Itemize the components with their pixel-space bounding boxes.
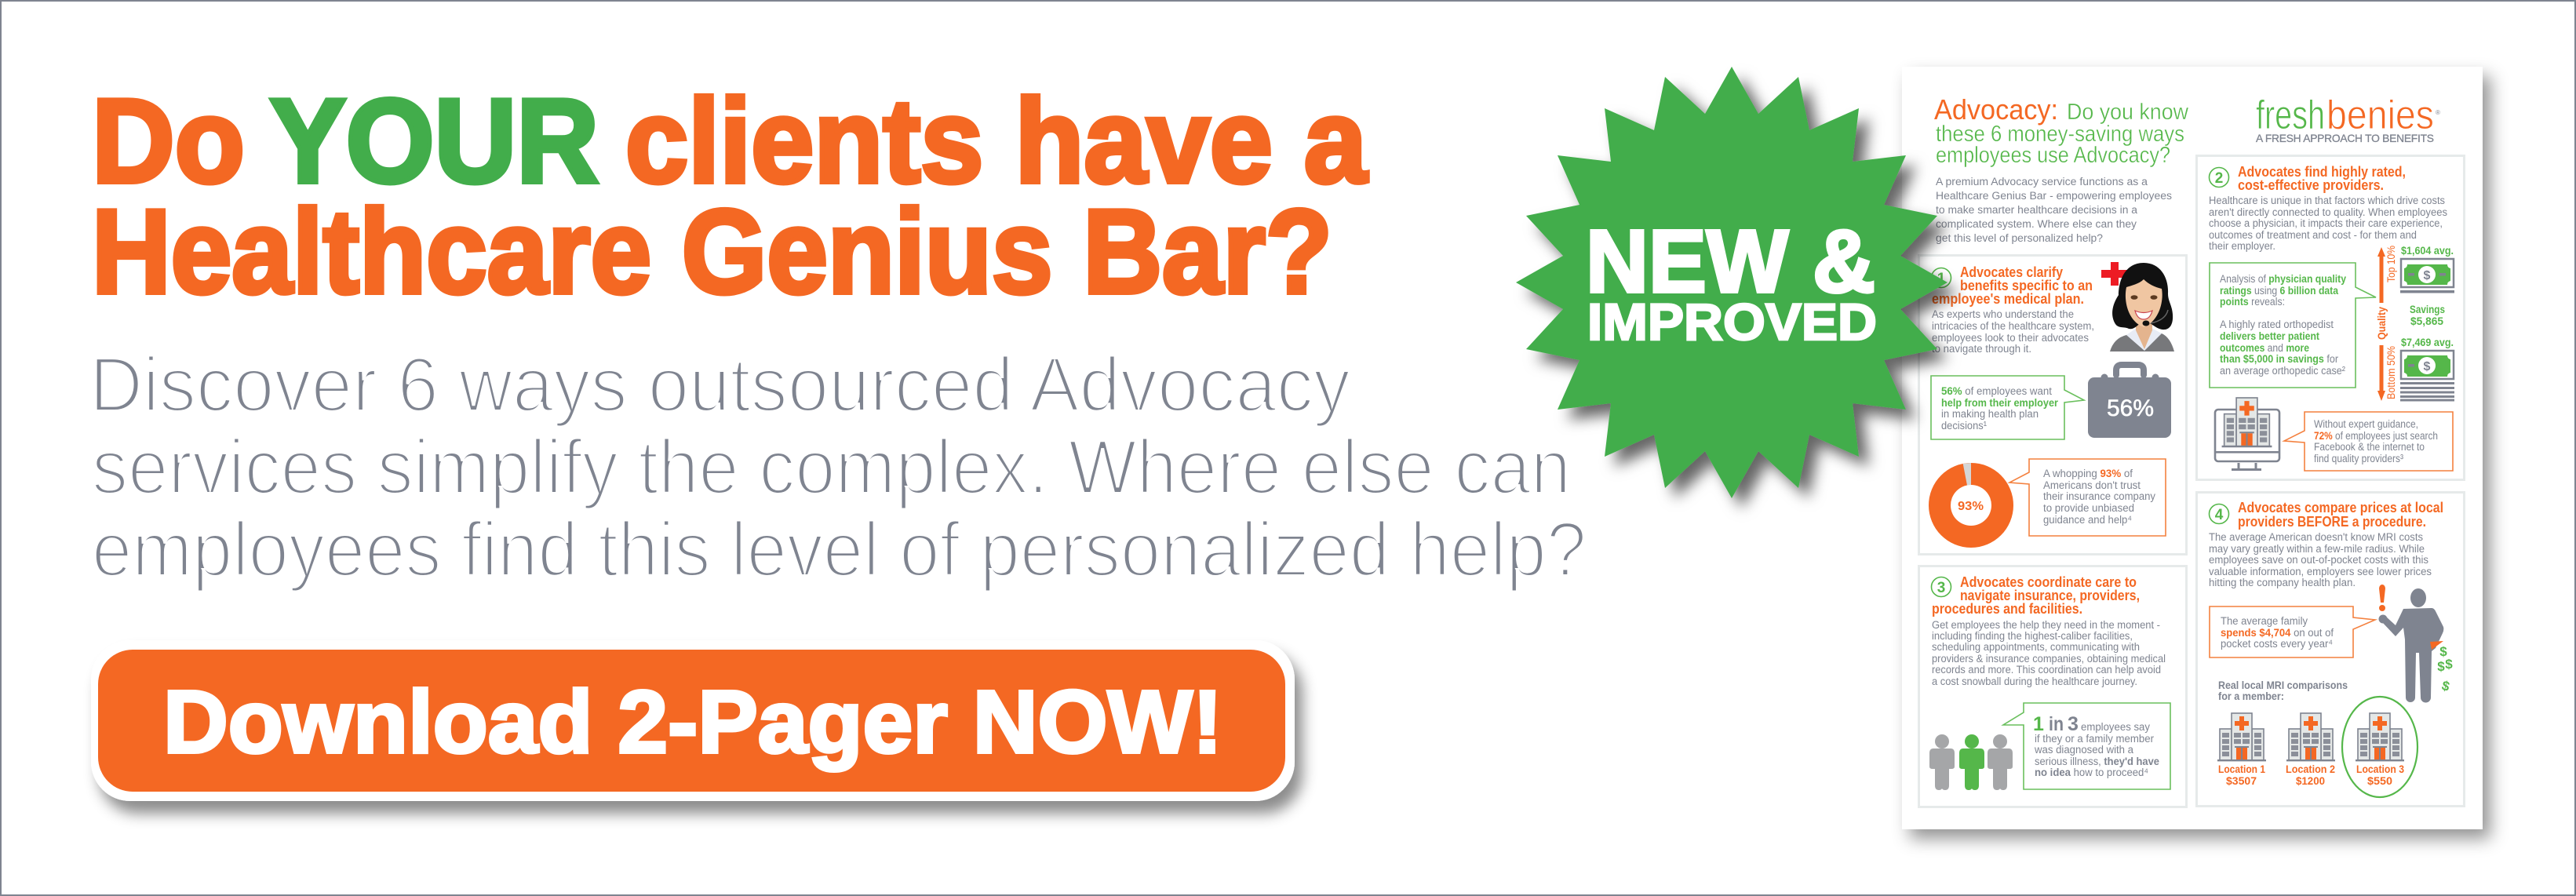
savings label	[2410, 304, 2445, 327]
heading 4: providers BEFORE a procedure.	[2238, 514, 2426, 530]
heading 1: employee's medical plan.	[1932, 291, 2084, 307]
subtitle: services simplify the complex. Where else can	[92, 424, 1571, 510]
heading 2	[2238, 164, 2406, 193]
number badge 1	[1932, 268, 1951, 287]
number badge 4: 4	[2215, 507, 2224, 523]
heading 1: benefits specific to an	[1960, 278, 2093, 293]
body text 1: intricacies of the healthcare system,	[1932, 320, 2094, 333]
icon: briefcase 56%	[2088, 365, 2171, 438]
callout: 93 percent	[2009, 459, 2166, 536]
document heading	[1934, 93, 2189, 168]
body text 4: The average American doesn't know MRI costs	[2209, 531, 2423, 544]
body text 3: Get employees the help they need in the moment -	[1932, 619, 2160, 632]
callout: 56 percent	[1931, 376, 2084, 439]
callout: physician quality	[2210, 263, 2376, 388]
location 3 highlighted: $550	[2367, 775, 2392, 787]
document intro text: Healthcare Genius Bar - empowering employees	[1936, 190, 2172, 202]
callout: 56 percent: 56% of employees want	[1941, 385, 2052, 398]
logo: freshbenies: A FRESH APPROACH TO BENEFITS	[2256, 133, 2434, 144]
callout: 72 percent	[2284, 412, 2453, 471]
savings label: Savings	[2410, 304, 2445, 315]
callout: physician quality: Analysis of physician quality	[2220, 273, 2346, 286]
body text 4: valuable information, employers see lower prices	[2209, 566, 2432, 578]
callout: 1 in 3: was diagnosed with a	[2034, 744, 2133, 756]
download button	[91, 640, 1295, 801]
document heading: these 6 money-saving ways	[1936, 122, 2184, 147]
quality axis arrows: Quality	[2375, 307, 2388, 340]
logo: freshbenies: benies	[2326, 93, 2434, 138]
download button: Download 2-Pager NOW!	[163, 672, 1222, 771]
title: Do	[92, 75, 245, 208]
body text 1	[1932, 308, 2094, 355]
logo: freshbenies: ®	[2436, 109, 2440, 116]
price: top 10%: $1,604 avg.	[2401, 245, 2454, 257]
title: YOUR	[270, 75, 599, 208]
subtitle: employees find this level of personalized help?	[92, 506, 1587, 592]
document intro text: A premium Advocacy service functions as a	[1936, 176, 2148, 188]
number badge 4	[2210, 504, 2228, 524]
callout: physician quality: delivers better patient	[2220, 330, 2319, 343]
price: bottom 50%: $7,469 avg.	[2401, 337, 2454, 348]
callout: 1 in 3: 1	[2033, 713, 2044, 735]
icon: man with empty pocket: $	[2437, 659, 2445, 674]
location 2	[2286, 713, 2335, 787]
callout: physician quality: than $5,000 in savings for	[2220, 353, 2338, 366]
body text 3	[1932, 619, 2166, 688]
badge: new and improved	[1516, 67, 1947, 498]
body text 4: may vary greatly within a few-mile radius. While	[2209, 543, 2425, 555]
panel 4: compare prices	[2197, 493, 2464, 807]
body text 1: employees look to their advocates	[1932, 332, 2089, 344]
body text 2: outcomes of treatment and cost - for them and	[2209, 229, 2417, 242]
document intro text: get this level of personalized help?	[1936, 232, 2103, 245]
location 1: $3507	[2226, 775, 2257, 787]
document heading: Do you know	[2067, 100, 2189, 125]
document heading: Advocacy:	[1934, 93, 2058, 126]
savings label: $5,865	[2410, 315, 2443, 327]
body text 1: to navigate through it.	[1932, 343, 2031, 355]
location 3 highlighted	[2342, 697, 2418, 797]
location 3 highlighted: Location 3	[2356, 763, 2404, 775]
number badge 2: 2	[2215, 170, 2223, 187]
body text 1: As experts who understand the	[1932, 308, 2074, 321]
callout: 72 percent: find quality providers³	[2314, 453, 2403, 465]
callout: 1 in 3: no idea how to proceed⁴	[2035, 767, 2148, 779]
number badge 2	[2210, 168, 2228, 187]
subtitle: Discover 6 ways outsourced Advocacy	[89, 341, 1350, 428]
title: Healthcare Genius Bar?	[92, 185, 1332, 319]
price: bottom 50%	[2400, 337, 2454, 402]
callout: 56 percent: help from their employer	[1941, 397, 2058, 410]
heading 4: Advocates compare prices at local	[2238, 500, 2443, 515]
callout: 56 percent: in making health plan	[1941, 408, 2039, 421]
logo: freshbenies	[2256, 93, 2440, 144]
title	[92, 75, 1368, 319]
callout: physician quality: outcomes and more	[2220, 342, 2309, 355]
icon: advocate with headset	[2101, 262, 2174, 351]
body text 3: a cost snowball during the healthcare journey.	[1932, 676, 2137, 688]
heading 1	[1932, 264, 2093, 307]
body text 3: scheduling appointments, communicating with	[1932, 641, 2140, 654]
icon: briefcase 56%: 56%	[2107, 395, 2154, 421]
body text 4: hitting the company health plan.	[2209, 577, 2356, 589]
icon: man with empty pocket: $	[2439, 644, 2447, 659]
panel 3: coordinate care	[1919, 566, 2186, 807]
heading 3	[1932, 574, 2140, 617]
body text 3: records and more. This coordination can help avoid	[1932, 664, 2161, 676]
callout: 93 percent: to provide unbiased	[2043, 502, 2134, 515]
callout: 93 percent: guidance and help⁴	[2043, 514, 2132, 526]
icon: hospital on monitor	[2215, 398, 2279, 471]
number badge 1: 1	[1937, 271, 1946, 287]
icon: man with empty pocket: $	[2445, 657, 2453, 672]
callout: physician quality: an average orthopedic case²	[2220, 365, 2345, 377]
callout: 72 percent: 72% of employees just search	[2314, 430, 2438, 443]
callout: physician quality: ratings using 6 billion data	[2220, 285, 2338, 297]
document intro text: to make smarter healthcare decisions in a	[1936, 204, 2137, 217]
panel 2: find providers	[2197, 155, 2464, 480]
donut chart 93%	[1929, 463, 2013, 548]
body text 2: aren't directly connected to quality. When employees	[2209, 206, 2447, 219]
body text 2: their employer.	[2209, 240, 2275, 253]
icon: three people	[1929, 734, 2013, 790]
body text 2: Healthcare is unique in that factors which drive costs	[2209, 195, 2445, 207]
heading 3: navigate insurance, providers,	[1960, 588, 2140, 603]
body text 3: including finding the highest-caliber facilities,	[1932, 630, 2133, 643]
callout: 1 in 3: employees say	[2081, 721, 2151, 734]
heading 3: procedures and facilities.	[1932, 601, 2082, 617]
quality axis arrows	[2375, 246, 2397, 401]
document intro text: complicated system. Where else can they	[1936, 218, 2137, 231]
MRI comparison label	[2218, 679, 2348, 703]
icon: man with empty pocket	[2379, 585, 2453, 703]
quality axis arrows: Top 10%	[2385, 246, 2397, 282]
callout: 1 in 3: serious illness, they'd have	[2035, 756, 2159, 768]
callout: 56 percent: decisions¹	[1941, 420, 1987, 432]
MRI comparison label: for a member:	[2218, 690, 2284, 703]
icon: man with empty pocket: $	[2440, 678, 2451, 694]
callout: 1 in 3: if they or a family member	[2035, 733, 2154, 745]
body text 2	[2209, 195, 2447, 253]
location 2: Location 2	[2286, 763, 2335, 775]
callout: family spend: pocket costs every year⁴	[2221, 638, 2333, 650]
price: top 10%: $	[2424, 269, 2431, 282]
callout: 72 percent: Facebook & the internet to	[2314, 441, 2425, 453]
heading 2: cost-effective providers.	[2238, 177, 2384, 193]
callout: physician quality: A highly rated orthopedist	[2220, 319, 2334, 331]
callout: 93 percent: Americans don't trust	[2043, 479, 2141, 492]
callout: family spend: The average family	[2221, 615, 2308, 628]
badge: new and improved: NEW &	[1586, 212, 1875, 311]
callout: 1 in 3: in	[2049, 713, 2064, 735]
heading 2: Advocates find highly rated,	[2238, 164, 2406, 180]
logo: freshbenies: fresh	[2256, 93, 2325, 138]
callout: 72 percent: Without expert guidance,	[2314, 418, 2418, 431]
callout: 93 percent: their insurance company	[2043, 490, 2156, 503]
price: bottom 50%: $	[2424, 360, 2431, 373]
heading 1: Advocates clarify	[1960, 264, 2063, 280]
location 1	[2217, 713, 2266, 787]
body text 4	[2209, 531, 2432, 589]
body text 4: employees save on out-of-pocket costs with this	[2209, 554, 2428, 566]
price: top 10%	[2400, 245, 2454, 293]
document heading: employees use Advocacy?	[1936, 143, 2170, 168]
body text 3: providers & insurance companies, obtaining medical	[1932, 653, 2166, 665]
callout: family spend: spends $4,704 on out of	[2221, 627, 2334, 639]
title: clients have a	[625, 75, 1368, 208]
number badge 3: 3	[1937, 580, 1945, 596]
callout: family spend	[2210, 606, 2375, 657]
panel 1: clarify benefits	[1919, 256, 2186, 554]
body text 2: choose a physician, it impacts their care experience,	[2209, 217, 2443, 230]
callout: 1 in 3	[2003, 703, 2170, 789]
subtitle	[89, 341, 1587, 592]
heading 3: Advocates coordinate care to	[1960, 574, 2137, 590]
location 1: Location 1	[2218, 763, 2265, 775]
quality axis arrows: Bottom 50%	[2385, 346, 2397, 399]
number badge 3	[1932, 577, 1951, 596]
donut chart 93%: 93%	[1958, 500, 1984, 513]
badge: new and improved: IMPROVED	[1587, 293, 1877, 351]
location 2: $1200	[2296, 775, 2325, 787]
MRI comparison label: Real local MRI comparisons	[2218, 679, 2348, 692]
document intro text	[1936, 176, 2172, 245]
document preview page	[1516, 67, 2483, 829]
callout: 1 in 3: 3	[2068, 713, 2079, 735]
callout: 93 percent: A whopping 93% of	[2043, 468, 2133, 480]
heading 4	[2238, 500, 2443, 530]
callout: physician quality: points reveals:	[2220, 296, 2285, 308]
